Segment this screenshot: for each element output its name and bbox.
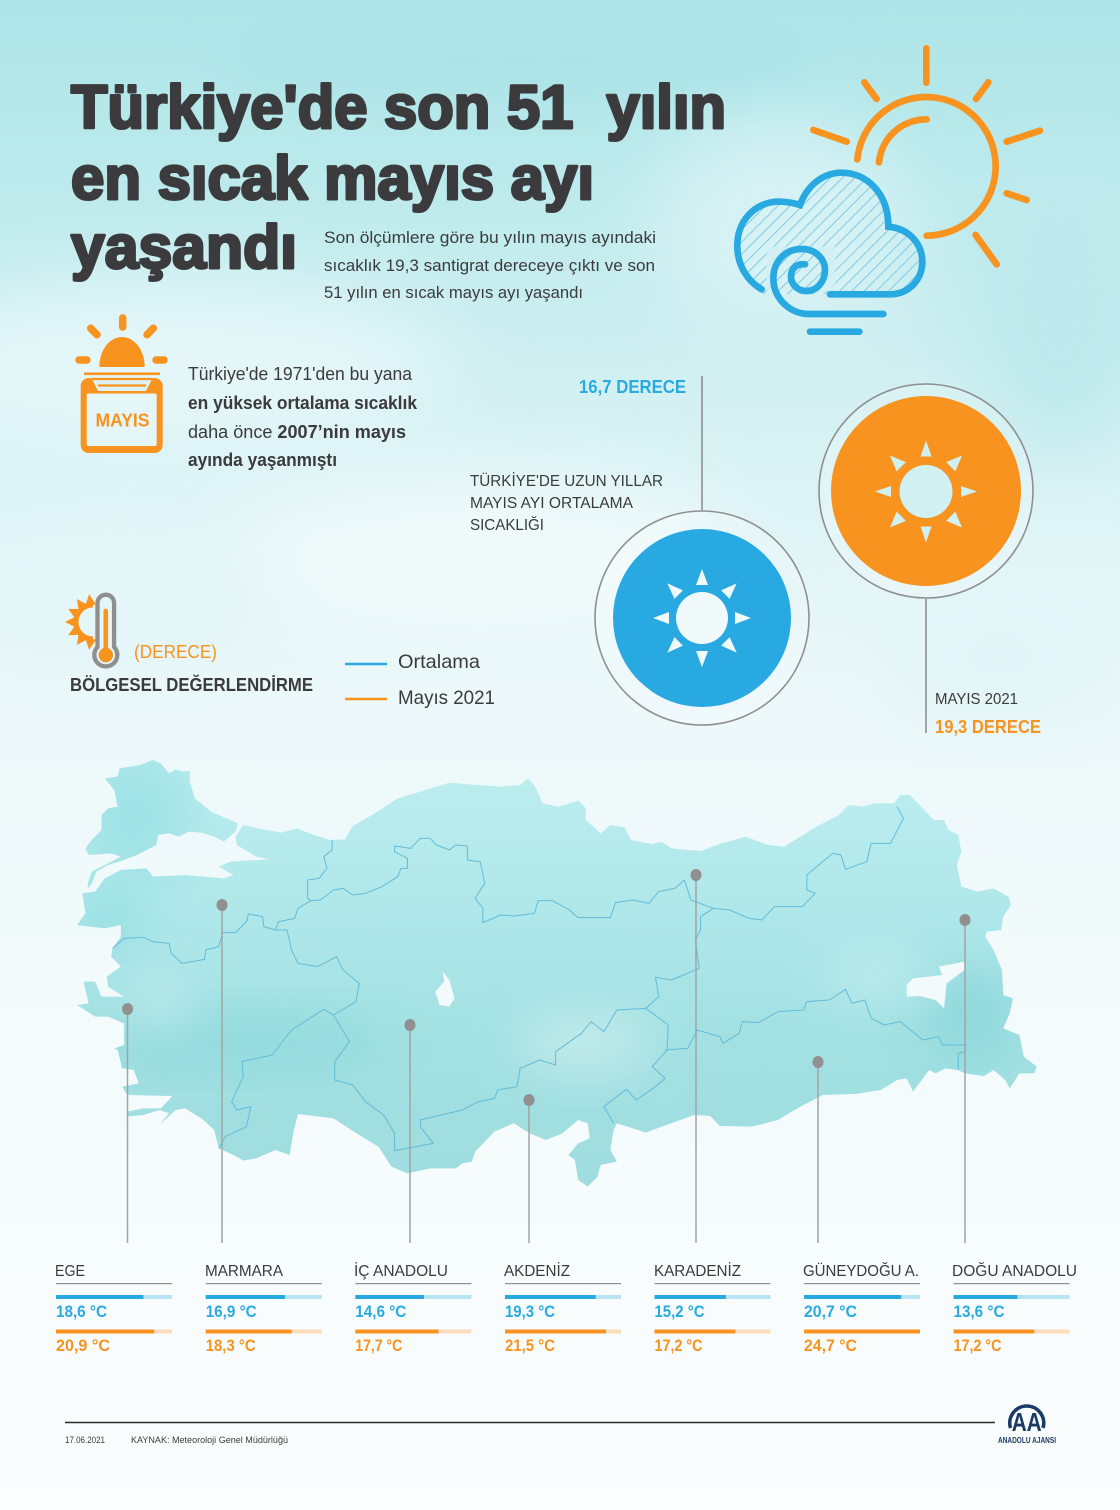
text: highest average temperature note: ayında yaşanmıştı (188, 450, 337, 470)
text: highest average temperature note (188, 364, 418, 470)
map pins and leader lines (122, 869, 970, 1243)
legend: series: Mayıs 2021 (398, 687, 495, 709)
region: Doğu Anadolu: 17,2 °C (954, 1336, 1002, 1355)
logo: Anadolu Ajansı (998, 1406, 1056, 1445)
icon: calendar with sun, MAYIS (79, 318, 164, 453)
region: Akdeniz: 19,3 °C (505, 1302, 555, 1321)
subtitle text: 51 yılın en sıcak mayıs ayı yaşandı (324, 283, 583, 302)
region: Ege: 20,9 °C (56, 1336, 110, 1355)
title: Türkiye'de son 51 yılın (71, 73, 726, 141)
callout: May 2021 19,3 (926, 598, 1041, 737)
logo: Anadolu Ajansı: ANADOLU AJANSI (998, 1435, 1056, 1445)
icon: thermometer with sun (65, 594, 117, 666)
region: Güneydoğu Anadolu: 24,7 °C (804, 1336, 857, 1355)
region: Ege: 18,6 °C (56, 1302, 107, 1321)
region: İç Anadolu (354, 1261, 471, 1355)
region: Marmara: 18,3 °C (206, 1336, 256, 1355)
logo: Anadolu Ajansı: AA (1012, 1407, 1042, 1437)
region: Ege: EGE (55, 1263, 85, 1280)
region: Marmara: MARMARA (205, 1263, 283, 1280)
footer source line (65, 1422, 995, 1445)
callout: May 2021 19,3: 19,3 DERECE (935, 717, 1041, 737)
text: highest average temperature note: daha önce 2007’nin mayıs (188, 422, 406, 442)
region: Güneydoğu Anadolu (803, 1261, 920, 1355)
icon: sun and cloud with wind (733, 48, 1040, 332)
orange sun circle (819, 384, 1033, 598)
region: Karadeniz (654, 1261, 770, 1355)
region: Doğu Anadolu (952, 1261, 1077, 1355)
legend heading: BÖLGESEL DEĞERLENDİRME (70, 674, 313, 695)
region: Doğu Anadolu: DOĞU ANADOLU (952, 1261, 1077, 1280)
text: highest average temperature note: en yüksek ortalama sıcaklık (188, 393, 418, 413)
legend heading: (DERECE) (134, 642, 217, 662)
region: İç Anadolu: 17,7 °C (355, 1336, 402, 1355)
region: Akdeniz: 21,5 °C (505, 1336, 555, 1355)
callout: long-term average 16,7: TÜRKİYE'DE UZUN YILLAR (470, 471, 663, 490)
region: Karadeniz: 15,2 °C (654, 1302, 704, 1321)
region: Doğu Anadolu: 13,6 °C (954, 1302, 1004, 1321)
region: Marmara (205, 1263, 322, 1355)
subtitle text: sıcaklık 19,3 santigrat dereceye çıktı ve son (324, 256, 655, 275)
callout: long-term average 16,7: SICAKLIĞI (470, 515, 544, 534)
region: Güneydoğu Anadolu: GÜNEYDOĞU A. (803, 1261, 919, 1280)
text: highest average temperature note: Türkiye'de 1971'den bu yana (188, 364, 413, 384)
blue sun circle (595, 511, 809, 725)
legend: series: Ortalama (398, 651, 480, 673)
region: Akdeniz (504, 1261, 621, 1355)
footer source line: KAYNAK: Meteoroloji Genel Müdürlüğü (131, 1435, 288, 1445)
region: Ege (55, 1263, 172, 1355)
callout: long-term average 16,7: MAYIS AYI ORTALAMA (470, 495, 633, 512)
subtitle text (324, 228, 656, 302)
region: İç Anadolu: İÇ ANADOLU (354, 1261, 448, 1280)
map of Turkey with regions (77, 760, 1037, 1186)
legend: series (345, 651, 495, 709)
region: Marmara: 16,9 °C (206, 1302, 257, 1321)
title (71, 73, 726, 281)
region: Akdeniz: AKDENİZ (504, 1261, 570, 1280)
title: en sıcak mayıs ayı (71, 144, 594, 212)
callout: May 2021 19,3: MAYIS 2021 (935, 691, 1018, 708)
legend heading (70, 642, 313, 695)
callout: long-term average 16,7 (470, 376, 702, 534)
callout: long-term average 16,7: 16,7 DERECE (579, 377, 686, 397)
region: İç Anadolu: 14,6 °C (355, 1302, 406, 1321)
subtitle text: Son ölçümlere göre bu yılın mayıs ayındaki (324, 228, 656, 247)
icon: calendar with sun, MAYIS: MAYIS (96, 410, 150, 431)
title: yaşandı (71, 213, 297, 281)
region: Güneydoğu Anadolu: 20,7 °C (804, 1302, 857, 1321)
footer source line: 17.06.2021 (65, 1435, 105, 1445)
region: Karadeniz: 17,2 °C (654, 1336, 702, 1355)
region: Karadeniz: KARADENİZ (654, 1261, 741, 1280)
